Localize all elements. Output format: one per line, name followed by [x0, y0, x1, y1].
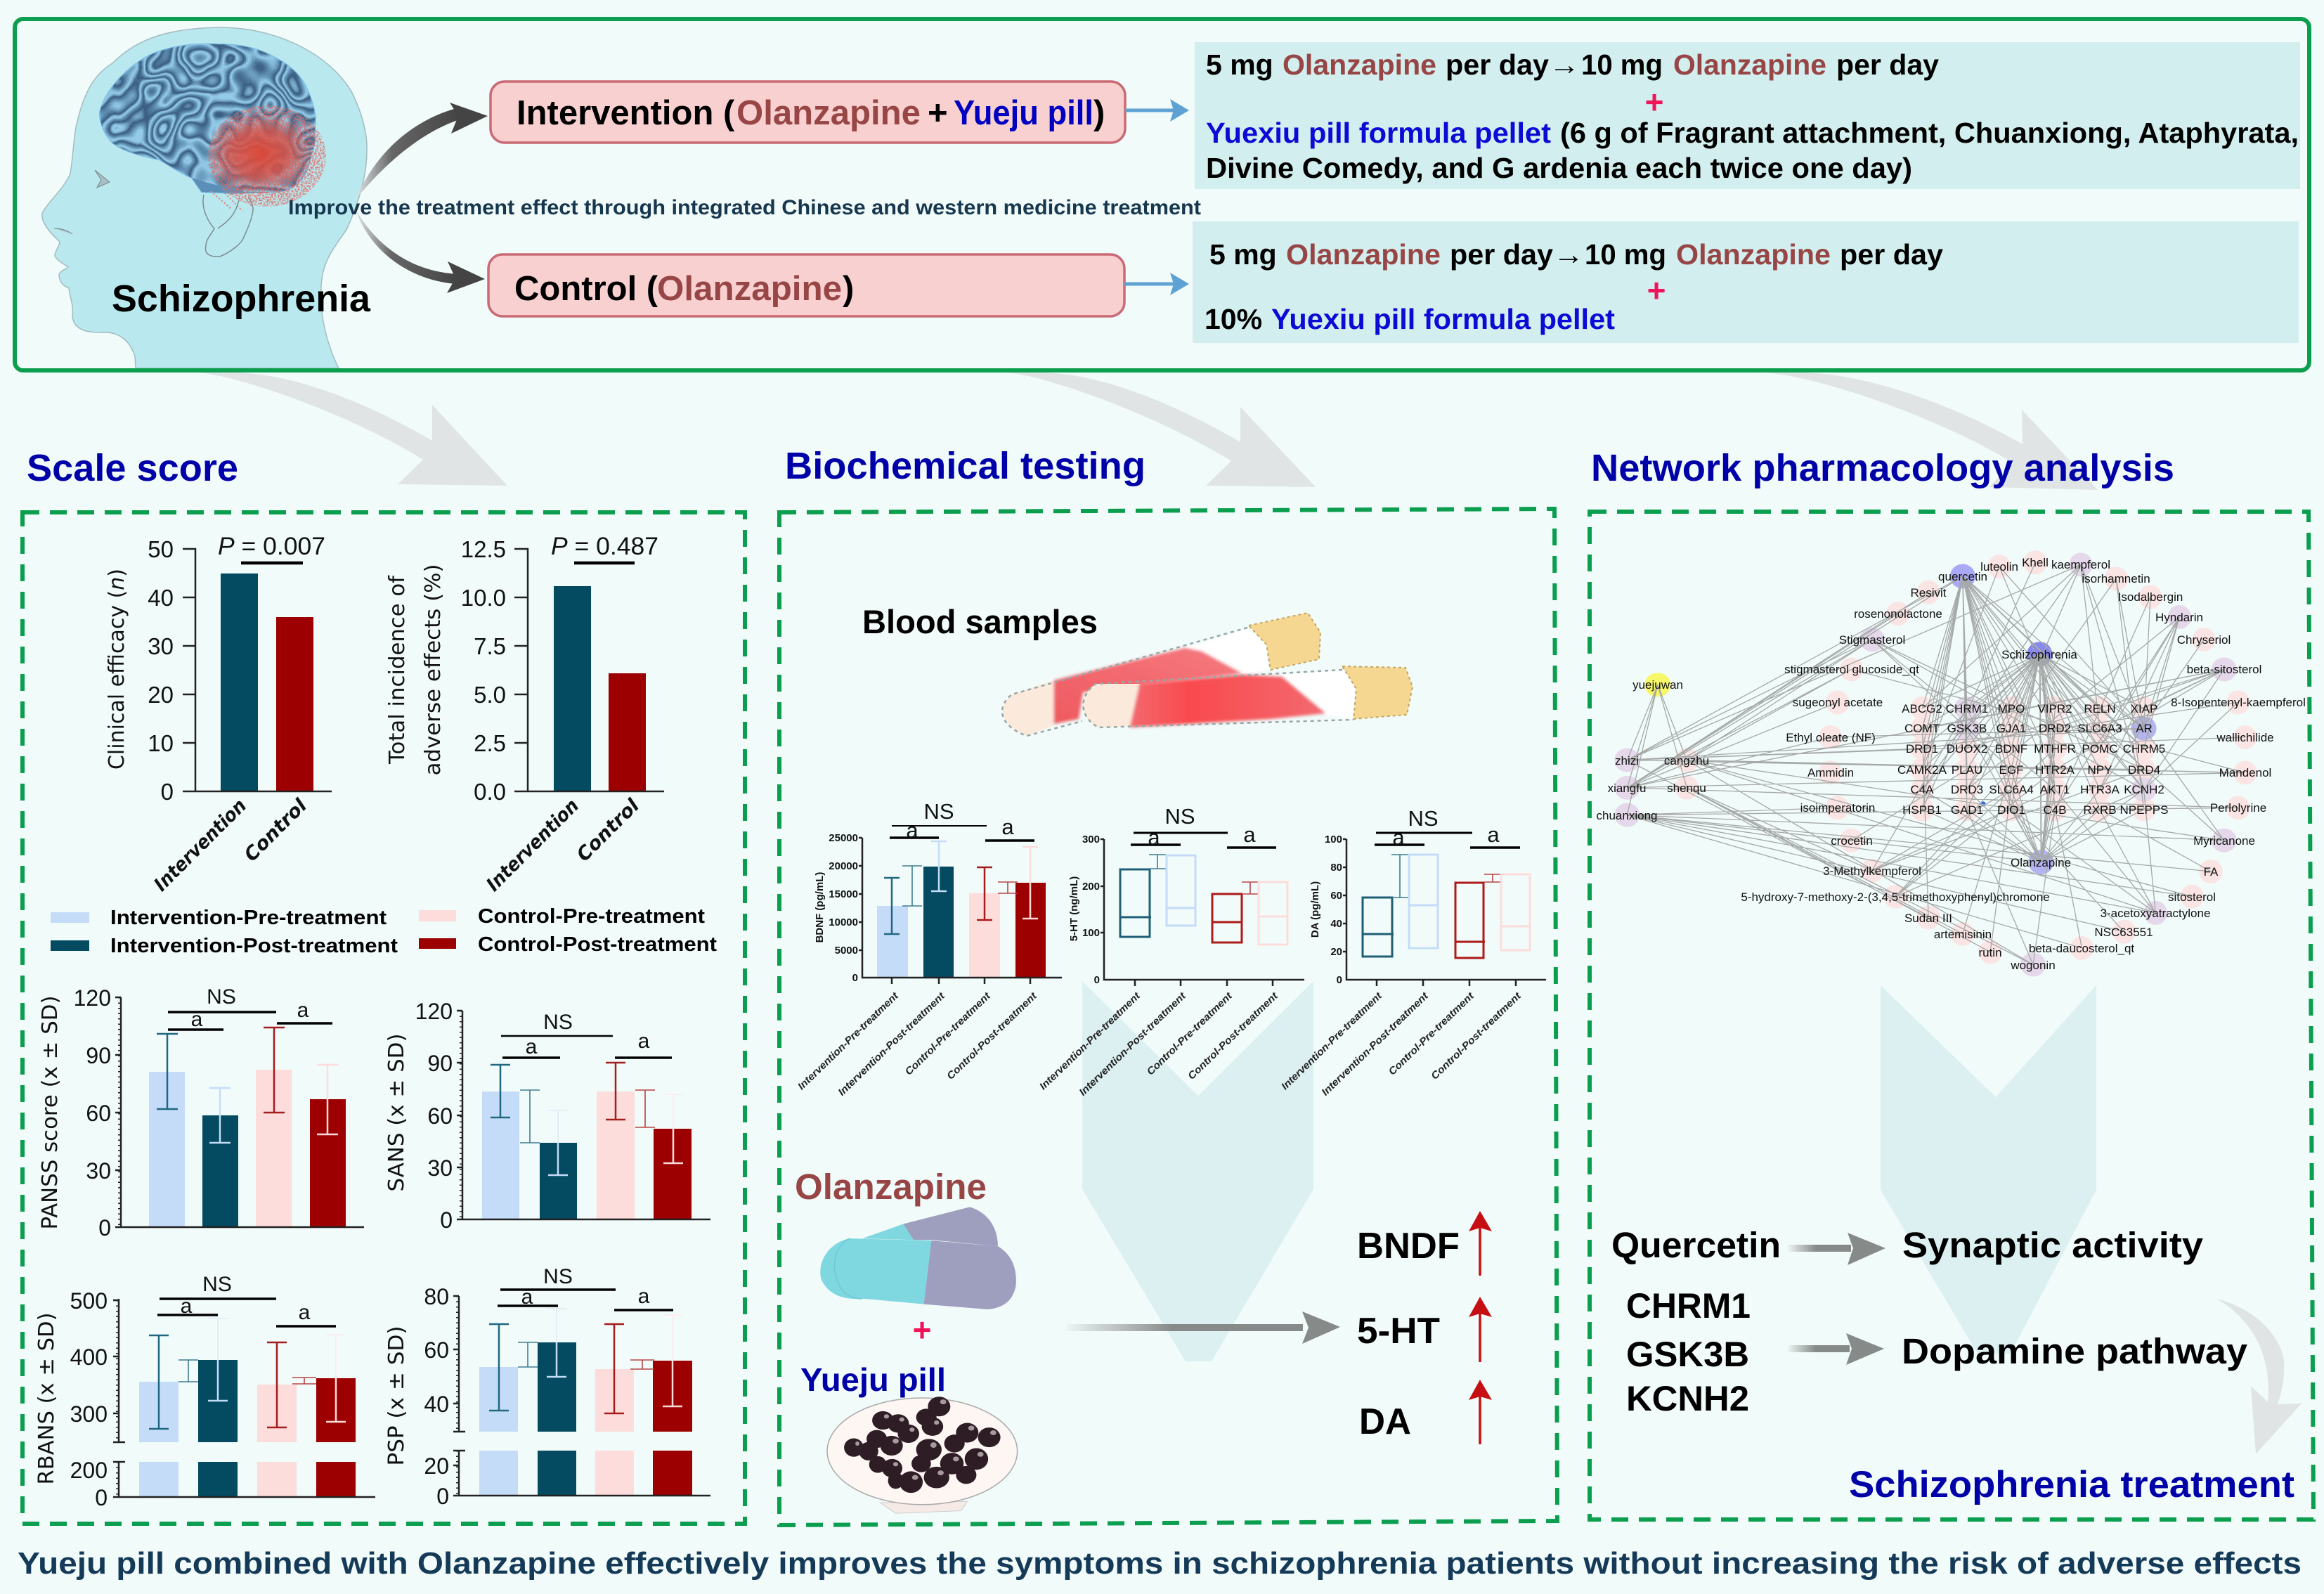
bar chart: SANS: NS — [543, 1011, 573, 1034]
labels: target genes: GSK3B — [1626, 1335, 1749, 1374]
bar chart: RBANS: 300 — [70, 1401, 108, 1427]
network labels: MPO — [1998, 702, 2025, 715]
illustration: head with brain — [42, 27, 367, 368]
bar chart: PSP: 60 — [424, 1337, 449, 1363]
network labels: wallichilide — [2216, 731, 2274, 744]
bar chart: SANS: a — [638, 1030, 650, 1053]
box: intervention group: Olanzapine — [736, 94, 921, 132]
network labels: rosenonolactone — [1854, 607, 1942, 621]
bar chart: PSP — [384, 1265, 710, 1509]
panel: scale score — [22, 512, 745, 1524]
box: intervention regimen: (6 g of Fragrant attachment, Chuanxiong, Ataphyrata, — [1560, 117, 2299, 149]
box plot: DA: 80 — [1330, 862, 1342, 874]
bar chart: adverse effects — [385, 533, 664, 896]
bar chart: adverse effects: 10.0 — [461, 585, 506, 611]
frame — [15, 19, 2309, 370]
network labels: quercetin — [1938, 570, 1987, 583]
box: control regimen: per day — [1840, 238, 1943, 271]
bar chart: SANS: 30 — [427, 1155, 453, 1181]
network labels: isoimperatorin — [1800, 801, 1875, 815]
bar chart: adverse effects: Total incidence of — [385, 575, 410, 765]
bar chart: PSP: a — [638, 1285, 650, 1308]
network labels: HTR2A — [2035, 763, 2075, 777]
box plot: DA: a — [1487, 822, 1500, 847]
network labels: DRD3 — [1951, 783, 1983, 796]
legend — [51, 905, 717, 957]
arrow: top panel to network pharmacology — [1763, 372, 2098, 490]
box: intervention regimen: Divine Comedy, and G ardenia each twice one day) — [1206, 152, 1912, 184]
legend: Control-Pre-treatment — [478, 905, 705, 928]
box plot: 5-HT: Intervention-Pre-treatment — [1038, 990, 1143, 1092]
bar chart: clinical efficacy: 40 — [148, 585, 174, 611]
network labels: CHRM1 — [1946, 702, 1988, 715]
box: intervention regimen: + — [1645, 84, 1663, 120]
ear outline — [203, 195, 253, 257]
network labels: chuanxiong — [1597, 809, 1657, 822]
box: intervention group: ) — [1093, 94, 1105, 132]
bar chart: SANS: SANS (x ± SD) — [384, 1033, 409, 1192]
network labels: ABCG2 — [1902, 702, 1942, 715]
network labels: stigmasterol glucoside_qt — [1784, 663, 1919, 676]
legend: Intervention-Post-treatment — [110, 935, 398, 957]
box plot: DA: a — [1392, 825, 1405, 850]
box plot: 5-HT: 100 — [1082, 927, 1100, 939]
network labels: HTR3A — [2080, 783, 2120, 796]
biomarker: DA up: DA — [1359, 1401, 1411, 1442]
bar chart: clinical efficacy: 0 — [161, 779, 174, 805]
arrow: top panel to biochemical testing — [1002, 372, 1316, 487]
labels: target genes: CHRM1 — [1626, 1286, 1751, 1326]
icon: bowl of pills — [827, 1397, 1018, 1513]
network labels: crocetin — [1831, 834, 1873, 848]
network labels: Mandenol — [2219, 766, 2271, 779]
biomarker: 5-HT up: 5-HT — [1357, 1311, 1440, 1352]
network labels: cangzhu — [1664, 754, 1709, 767]
caption: integrated treatment: Improve the treatment effect through integrated Chinese and western medicine treatment — [288, 196, 1201, 219]
label: schizophrenia: Schizophrenia — [112, 278, 371, 320]
top panel: study design — [15, 19, 2309, 370]
box: intervention group: Intervention ( — [517, 94, 735, 132]
network labels: RELN — [2084, 702, 2116, 715]
box: control group: Control ( — [514, 270, 658, 308]
legend: Intervention-Pre-treatment — [110, 907, 387, 929]
bar chart: SANS: 120 — [415, 999, 453, 1024]
bar chart: PSP: 20 — [424, 1453, 449, 1479]
label: schizophrenia treatment: Schizophrenia treatment — [1849, 1464, 2294, 1505]
box plot: 5-HT: NS — [1164, 804, 1195, 829]
network labels: SLC6A3 — [2077, 722, 2122, 735]
network labels: NSC63551 — [2094, 926, 2153, 939]
bar chart: RBANS — [34, 1273, 375, 1510]
network labels: AKT1 — [2040, 783, 2070, 796]
network labels: BDNF — [1995, 742, 2027, 756]
network labels: GSK3B — [1947, 722, 1987, 735]
network labels: C4B — [2043, 803, 2067, 817]
bar chart: RBANS: 500 — [70, 1288, 108, 1314]
box: intervention regimen: Olanzapine — [1283, 48, 1436, 81]
box: intervention regimen — [1195, 42, 2300, 189]
network labels: wogonin — [2010, 959, 2056, 972]
label: blood samples: Blood samples — [862, 603, 1098, 640]
bar chart: PANSS score: a — [297, 999, 309, 1022]
network labels: PLAU — [1952, 763, 1982, 777]
bar chart: clinical efficacy: Control — [240, 795, 311, 866]
panel: biochemical testing — [779, 509, 1557, 1525]
network labels: beta-daucosterol_qt — [2029, 942, 2134, 955]
bar chart: adverse effects: 7.5 — [474, 633, 506, 659]
network labels: CAMK2A — [1897, 763, 1947, 777]
box plot: 5-HT — [1038, 804, 1304, 1099]
box: intervention regimen: 10 mg — [1581, 48, 1663, 81]
bar chart: BDNF: Intervention-Post-treatment — [836, 990, 948, 1099]
chevron: network panel background arrow — [1881, 985, 2096, 1354]
bar chart: BDNF: 15000 — [829, 888, 858, 900]
network labels: COMT — [1904, 722, 1940, 735]
box plot: DA: 40 — [1330, 918, 1342, 930]
network labels: Hyndarin — [2155, 611, 2203, 624]
biomarker: DA up — [1359, 1380, 1492, 1444]
eye and brow — [54, 170, 110, 234]
label: olanzapine: Olanzapine — [795, 1167, 987, 1207]
box: intervention group: Yueju pill — [954, 94, 1093, 132]
bar chart: PSP: 0 — [436, 1484, 449, 1509]
box: control regimen: Olanzapine — [1286, 238, 1441, 271]
bar chart: PSP: 40 — [424, 1392, 449, 1417]
bar chart: PANSS score — [38, 985, 364, 1240]
bar chart: BDNF — [796, 799, 1062, 1099]
box plot: DA — [1280, 806, 1546, 1099]
box plot: DA: DA (pg/mL) — [1309, 881, 1321, 938]
network labels: NPEPPS — [2120, 803, 2168, 817]
arrow: quercetin to synaptic activity — [1788, 1233, 1885, 1265]
bar chart: adverse effects: P = 0.487 — [551, 533, 658, 560]
label: yueju pill: Yueju pill — [800, 1361, 946, 1398]
network labels: POMC — [2082, 742, 2118, 756]
box: control group: ) — [843, 270, 854, 308]
bar chart: PANSS score: 120 — [74, 985, 111, 1011]
network labels: Ethyl oleate (NF) — [1786, 731, 1876, 744]
bar chart: PANSS score: 30 — [86, 1158, 111, 1184]
bar chart: clinical efficacy: 50 — [148, 536, 174, 562]
network labels: 3-acetoxyatractylone — [2101, 907, 2210, 920]
bar chart: PANSS score: 0 — [98, 1215, 111, 1240]
network labels: HSPB1 — [1902, 803, 1942, 817]
arrow: top panel to scale score — [194, 372, 507, 486]
network labels: DUOX2 — [1947, 742, 1987, 756]
network labels: Ammidin — [1807, 766, 1854, 779]
bar chart: RBANS: RBANS (x ± SD) — [34, 1312, 59, 1485]
bar chart: RBANS: a — [181, 1295, 193, 1318]
biomarker: BDNF up — [1357, 1211, 1492, 1276]
bar chart: RBANS: NS — [202, 1273, 232, 1296]
icon: capsules — [820, 1207, 1016, 1309]
bar chart: adverse effects: Intervention — [482, 795, 583, 896]
network labels: luteolin — [1980, 560, 2018, 574]
bar chart: PANSS score: a — [191, 1008, 203, 1031]
network labels: sitosterol — [2168, 890, 2216, 904]
network labels: xiangfu — [1608, 782, 1646, 795]
bar chart: BDNF: BDNF (pg/mL) — [814, 872, 826, 942]
network labels: DRD1 — [1906, 742, 1938, 756]
box plot: DA: Intervention-Post-treatment — [1320, 990, 1432, 1099]
bar chart: clinical efficacy: Intervention — [150, 795, 251, 896]
box plot: 5-HT: a — [1148, 825, 1160, 850]
heading: scale score: Scale score — [27, 447, 238, 489]
panel: network pharmacology analysis — [1590, 512, 2313, 1520]
network labels: SLC6A4 — [1989, 783, 2034, 796]
network labels: Schizophrenia — [2001, 648, 2077, 661]
box plot: DA: Intervention-Pre-treatment — [1280, 990, 1385, 1092]
box: control regimen: 10% — [1205, 303, 1262, 335]
box plot: 5-HT: 200 — [1082, 881, 1100, 893]
bar chart: BDNF: Control-Post-treatment — [945, 990, 1040, 1082]
network labels: 8-Isopentenyl-kaempferol — [2171, 696, 2306, 709]
network labels: artemisinin — [1934, 928, 1992, 941]
box plot: DA: 0 — [1337, 974, 1342, 986]
bar chart: RBANS: 400 — [70, 1344, 108, 1370]
head silhouette — [42, 27, 367, 368]
network labels: XIAP — [2131, 702, 2157, 715]
box: control regimen: 5 mg — [1209, 238, 1277, 271]
box plot: 5-HT: Intervention-Post-treatment — [1077, 990, 1189, 1099]
network labels: beta-sitosterol — [2187, 663, 2261, 676]
bar chart: PSP: a — [521, 1285, 533, 1309]
box: control regimen: + — [1647, 272, 1666, 309]
bar chart: PANSS score: 60 — [86, 1101, 111, 1126]
box plot: DA: 100 — [1325, 834, 1342, 845]
network labels: FA — [2204, 865, 2219, 879]
biomarker: 5-HT up — [1357, 1297, 1492, 1362]
bar chart: clinical efficacy: Clinical efficacy (n) — [105, 569, 129, 770]
arrow: curved to treatment — [2217, 1299, 2302, 1454]
network labels: KCNH2 — [2124, 783, 2164, 796]
bar chart: SANS — [384, 999, 710, 1233]
bar chart: clinical efficacy — [105, 533, 332, 896]
bar chart: adverse effects: 12.5 — [461, 536, 506, 562]
network labels: Stigmasterol — [1839, 633, 1905, 647]
arrow: control to regimen — [1124, 273, 1189, 295]
network labels: zhizi — [1615, 754, 1639, 767]
box: control regimen: 10 mg — [1585, 238, 1666, 271]
network labels — [1597, 556, 2306, 972]
bar chart: PANSS score: 90 — [86, 1043, 111, 1068]
network labels: yuejuwan — [1632, 678, 1683, 692]
network labels: Olanzapine — [2011, 856, 2071, 869]
box: control regimen: per day — [1450, 238, 1553, 271]
arrow: genes to dopamine pathway — [1788, 1333, 1884, 1365]
bar chart: PANSS score: NS — [207, 985, 236, 1009]
box plot: 5-HT: 0 — [1094, 974, 1100, 986]
box: intervention regimen: → — [1549, 48, 1580, 81]
network labels: Resivit — [1910, 586, 1947, 600]
box: control regimen — [1193, 221, 2299, 343]
bar chart: adverse effects: 5.0 — [474, 682, 506, 708]
box plot: DA: 20 — [1330, 946, 1342, 958]
brain — [91, 39, 326, 211]
network labels: isorhamnetin — [2082, 572, 2150, 585]
bar chart: PANSS score: PANSS score (x ± SD) — [38, 996, 63, 1229]
box: intervention regimen: per day — [1446, 48, 1549, 81]
bar chart: adverse effects: Control — [573, 795, 644, 866]
bar chart: clinical efficacy: 20 — [148, 682, 174, 708]
bar chart: BDNF: Control-Pre-treatment — [903, 990, 994, 1077]
network labels: 3-Methylkempferol — [1823, 864, 1921, 878]
bar chart: BDNF: a — [1001, 815, 1014, 839]
box: control regimen: → — [1553, 238, 1584, 271]
network labels: Isodalbergin — [2118, 590, 2183, 604]
conclusion text: Yueju pill combined with Olanzapine effectively improves the symptoms in schizophrenia patients without increasing the risk of adverse effects — [18, 1546, 2302, 1581]
bar chart: BDNF: Intervention-Pre-treatment — [796, 990, 902, 1092]
bar chart: PSP: PSP (x ± SD) — [384, 1326, 409, 1466]
bar chart: SANS: 90 — [427, 1051, 453, 1076]
illustration: blood tubes — [1002, 613, 1413, 736]
box plot: 5-HT: Control-Pre-treatment — [1145, 990, 1235, 1077]
network labels: DRD4 — [2128, 763, 2160, 777]
network labels: RXRB — [2083, 803, 2117, 817]
heading: network pharmacology analysis: Network pharmacology analysis — [1591, 447, 2174, 489]
network labels: EGF — [1999, 763, 2023, 777]
box: control group: Olanzapine — [657, 270, 842, 308]
bar chart: RBANS: 0 — [95, 1485, 108, 1510]
box: intervention regimen: per day — [1836, 48, 1939, 81]
network labels: Sudan III — [1904, 912, 1952, 925]
bar chart: BDNF: 20000 — [829, 860, 858, 872]
network labels: GJA1 — [1997, 722, 2026, 735]
arrow: treatment to biomarkers — [1067, 1311, 1340, 1344]
label: quercetin: Quercetin — [1611, 1225, 1781, 1265]
box: intervention group — [491, 82, 1125, 143]
bar chart: SANS: 0 — [440, 1207, 453, 1233]
network labels: NPY — [2088, 763, 2112, 777]
network nodes — [1614, 550, 2257, 977]
box plot: DA: NS — [1408, 806, 1439, 831]
bar chart: BDNF: 5000 — [835, 945, 858, 957]
bar chart: BDNF: 25000 — [829, 832, 858, 844]
network labels: shenqu — [1667, 782, 1706, 795]
box plot: DA: Control-Post-treatment — [1429, 990, 1524, 1082]
network labels: AR — [2136, 722, 2153, 735]
bar chart: PSP: 80 — [424, 1284, 449, 1309]
chevron: biochemical panel background arrow — [1082, 981, 1313, 1361]
box plot: DA: Control-Pre-treatment — [1387, 990, 1477, 1077]
bar chart: RBANS: 200 — [70, 1458, 108, 1483]
bar chart: PSP: NS — [543, 1265, 573, 1288]
bar chart: BDNF: 0 — [852, 972, 858, 984]
labels: target genes: KCNH2 — [1626, 1379, 1749, 1418]
box: intervention regimen: Olanzapine — [1673, 48, 1826, 81]
network labels: C4A — [1910, 783, 1934, 796]
bar chart: clinical efficacy: P = 0.007 — [218, 533, 325, 560]
legend: Control-Post-treatment — [478, 933, 717, 956]
network labels: DIO1 — [1997, 803, 2025, 817]
bar chart: BDNF: a — [906, 818, 918, 843]
labels: target genes — [1626, 1286, 1751, 1418]
network labels: 5-hydroxy-7-methoxy-2-(3,4,5-trimethoxyphenyl)chromone — [1741, 890, 2050, 904]
arrow: intervention to regimen — [1125, 99, 1189, 122]
network labels: kaempferol — [2051, 558, 2110, 571]
box: control group — [488, 254, 1124, 316]
label: synaptic activity: Synaptic activity — [1902, 1225, 2204, 1265]
arrow: to intervention — [356, 103, 488, 200]
box: control regimen: Yuexiu pill formula pellet — [1271, 303, 1615, 335]
heading: biochemical testing: Biochemical testing — [785, 445, 1145, 487]
network labels: rutin — [1978, 946, 2002, 959]
network labels: GAD1 — [1951, 803, 1983, 817]
bar chart: clinical efficacy: 30 — [148, 633, 174, 659]
box: control regimen: Olanzapine — [1676, 238, 1831, 271]
box plot: DA: 60 — [1330, 890, 1342, 902]
box: intervention regimen: 5 mg — [1206, 48, 1273, 81]
network labels: DRD2 — [2039, 722, 2071, 735]
bar chart: adverse effects: 2.5 — [474, 730, 506, 756]
biomarker: BDNF up: BNDF — [1357, 1226, 1460, 1266]
network labels: CHRM5 — [2123, 742, 2165, 756]
network edges — [1627, 562, 2245, 965]
bar chart: adverse effects: adverse effects (%) — [421, 564, 446, 776]
network labels: Myricanone — [2193, 834, 2255, 848]
network labels: MTHFR — [2034, 742, 2076, 756]
bar chart: clinical efficacy: 10 — [148, 730, 174, 756]
network diagram — [1597, 550, 2306, 977]
bar chart: adverse effects: 0.0 — [474, 779, 506, 805]
box: intervention group: + — [928, 94, 948, 132]
box: intervention regimen: Yuexiu pill formula pellet — [1206, 117, 1551, 149]
bar chart: BDNF: NS — [923, 799, 954, 824]
bar chart: RBANS: a — [299, 1301, 311, 1324]
label: dopamine pathway: Dopamine pathway — [1902, 1331, 2248, 1371]
bar chart: BDNF: 10000 — [829, 916, 858, 928]
network labels: sugeonyl acetate — [1793, 696, 1883, 709]
box plot: 5-HT: Control-Post-treatment — [1186, 990, 1281, 1082]
network labels: Khell — [2022, 556, 2049, 569]
bar chart: SANS: a — [526, 1035, 538, 1058]
box plot: 5-HT: 5-HT (ng/mL) — [1068, 876, 1080, 941]
network labels: VIPR2 — [2037, 702, 2072, 715]
network labels: Chryseriol — [2177, 633, 2231, 647]
box plot: 5-HT: 300 — [1082, 834, 1100, 845]
bar chart: SANS: 60 — [427, 1103, 453, 1129]
box plot: 5-HT: a — [1243, 822, 1256, 847]
network labels: Perlolyrine — [2210, 801, 2266, 815]
plus sign: + — [913, 1311, 931, 1348]
arrow: to control — [356, 209, 485, 293]
